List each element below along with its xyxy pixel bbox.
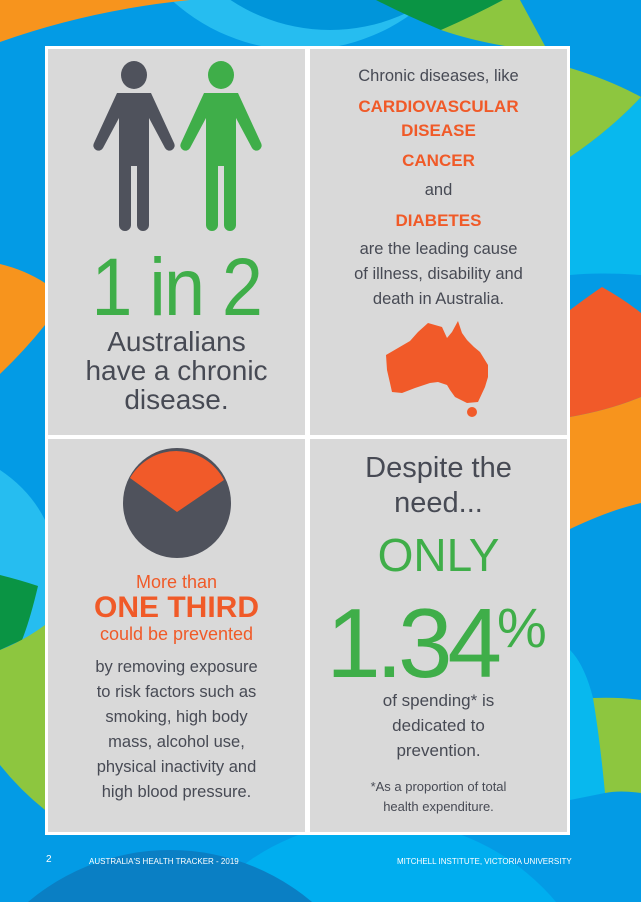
text: more than one third: More than <box>136 572 217 592</box>
heading: despite the need <box>365 452 512 519</box>
text: AUSTRALIA'S HEALTH TRACKER - 2019 <box>89 857 239 866</box>
text: Australians have a chronic disease <box>85 326 268 415</box>
text: leading cause <box>354 240 523 308</box>
icon: two people <box>93 61 262 231</box>
panel: chronic diseases: DISEASE <box>401 121 476 140</box>
panel: one third <box>48 439 305 832</box>
heading: despite the need: need... <box>394 487 483 519</box>
text: risk factors: high blood pressure. <box>102 783 251 801</box>
footnote <box>370 779 506 814</box>
panel: one third: ONE THIRD <box>94 591 259 624</box>
panel: chronic diseases: CANCER <box>402 151 475 170</box>
icon: pie chart <box>123 448 231 558</box>
panel: one third: could be prevented <box>100 624 253 644</box>
footnote: health expenditure. <box>383 799 494 814</box>
stat: 1 in 2: 1 in 2 <box>92 242 261 333</box>
text: risk factors: mass, alcohol use, <box>108 733 245 751</box>
text: of spending <box>383 691 494 760</box>
text: Australians have a chronic disease: disease. <box>124 384 229 415</box>
text: diseases list: Chronic diseases, like <box>358 67 519 85</box>
footer: 2 <box>46 854 52 865</box>
text: risk factors: by removing exposure <box>95 658 258 676</box>
text: leading cause: death in Australia. <box>373 290 504 308</box>
text: of spending: dedicated to <box>392 716 485 735</box>
panel: spending: 1.34% <box>326 588 547 698</box>
text: risk factors <box>95 658 258 801</box>
stat: only 1.34%: ONLY <box>378 529 499 581</box>
panel: chronic diseases <box>310 49 567 435</box>
panel: spending <box>310 439 567 832</box>
panel: chronic diseases: CARDIOVASCULAR <box>358 97 519 116</box>
text: risk factors: smoking, high body <box>105 708 248 726</box>
text: Australians have a chronic disease: Australians <box>107 326 246 357</box>
text: risk factors: physical inactivity and <box>97 758 256 776</box>
panel: chronic diseases: and <box>425 181 452 199</box>
heading: despite the need: Despite the <box>365 452 512 484</box>
icon: Australia map <box>386 321 488 417</box>
panel: 1 in 2 <box>48 49 305 435</box>
text: Australians have a chronic disease: have a chronic <box>85 355 268 386</box>
footnote: *As a proportion of total <box>371 779 506 794</box>
panel: chronic diseases: DIABETES <box>396 211 481 230</box>
text: leading cause: of illness, disability and <box>354 265 523 283</box>
text: of spending: prevention. <box>396 741 481 760</box>
text: MITCHELL INSTITUTE, VICTORIA UNIVERSITY <box>397 857 572 866</box>
text: leading cause: are the leading cause <box>360 240 517 258</box>
text: risk factors: to risk factors such as <box>97 683 256 701</box>
frame <box>45 46 570 835</box>
text: of spending: of spending* is <box>383 691 494 710</box>
